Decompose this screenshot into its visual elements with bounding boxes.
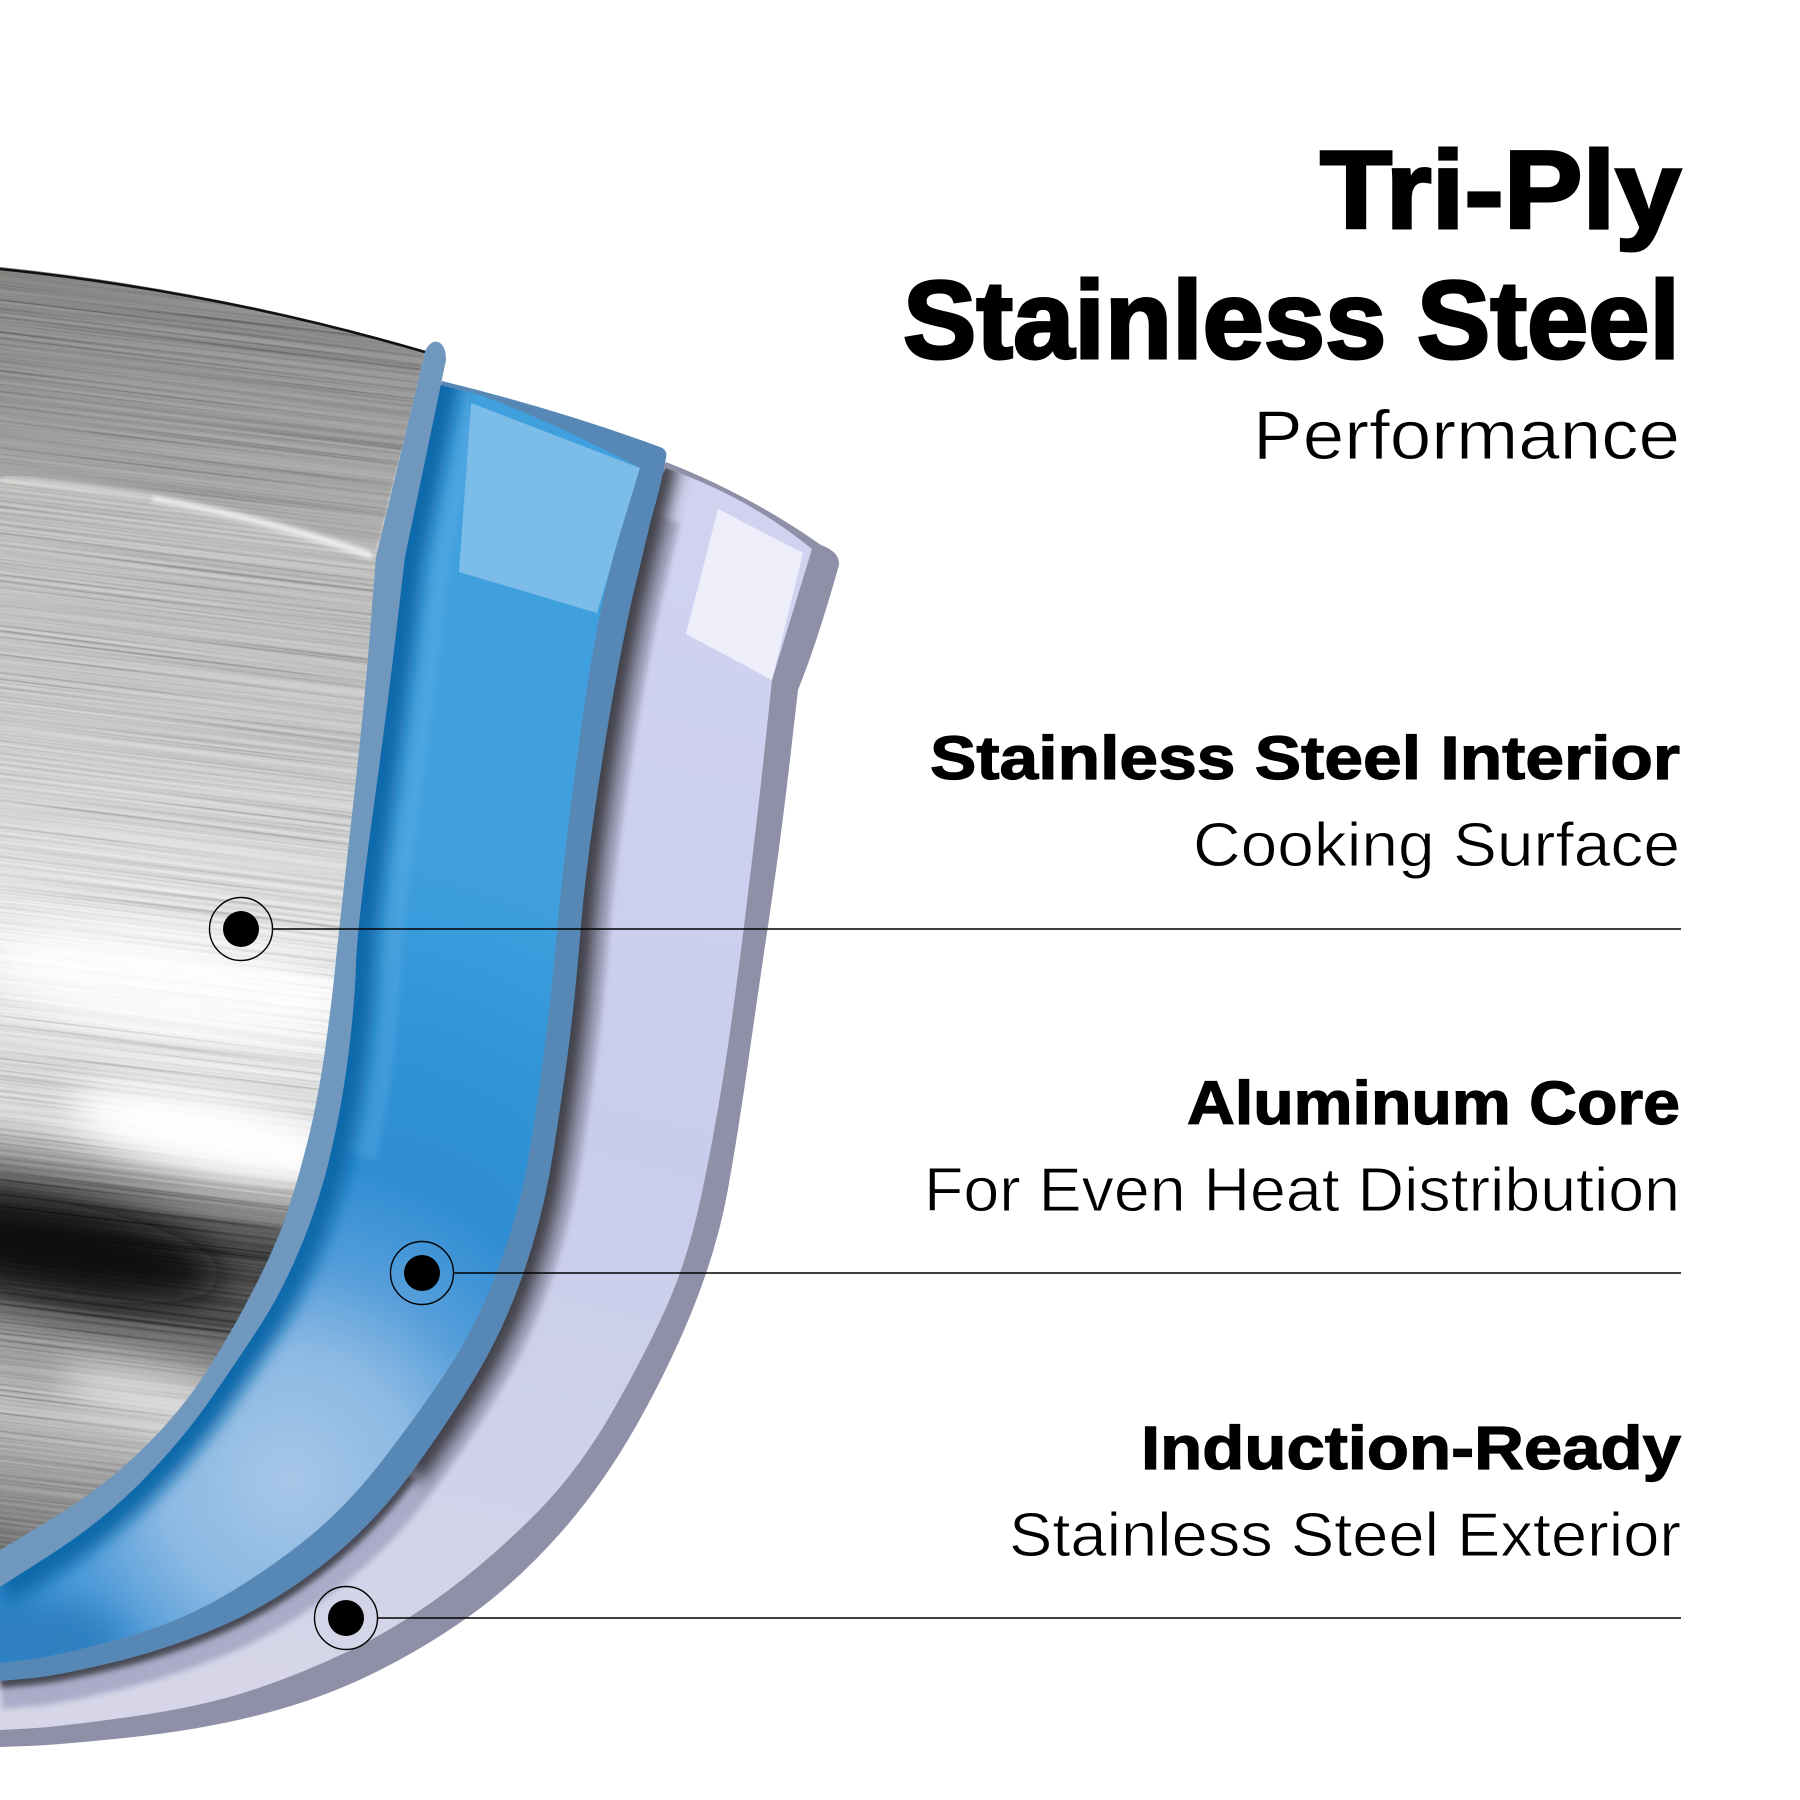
callout: aluminum core marker [390, 1242, 1681, 1304]
layer: outer stainless steel exterior [0, 458, 839, 1747]
label: aluminum core: Aluminum Core [1187, 1069, 1680, 1137]
layer: inner band [0, 342, 446, 1587]
label: aluminum core: For Even Heat Distribution [924, 1156, 1680, 1225]
title [903, 129, 1681, 382]
title: Stainless Steel [903, 259, 1680, 382]
label: stainless steel interior [930, 724, 1680, 880]
illustration: tri-ply pot cross-section [0, 170, 839, 1747]
layer: brushed steel cooking surface [0, 267, 426, 1650]
subtitle: Performance [1253, 396, 1680, 474]
label: stainless steel interior: Cooking Surface [1193, 811, 1680, 880]
label: aluminum core [924, 1069, 1680, 1225]
label: induction-ready: Stainless Steel Exterior [1009, 1501, 1681, 1570]
title: Tri-Ply [1320, 129, 1681, 252]
callout: cooking surface marker [210, 898, 1681, 960]
label: induction-ready: Induction-Ready [1141, 1414, 1681, 1482]
label: stainless steel interior: Stainless Steel Interior [930, 724, 1680, 792]
layer: aluminum core [0, 360, 666, 1681]
label: induction-ready [1009, 1414, 1681, 1570]
callout: exterior marker [314, 1586, 1681, 1650]
